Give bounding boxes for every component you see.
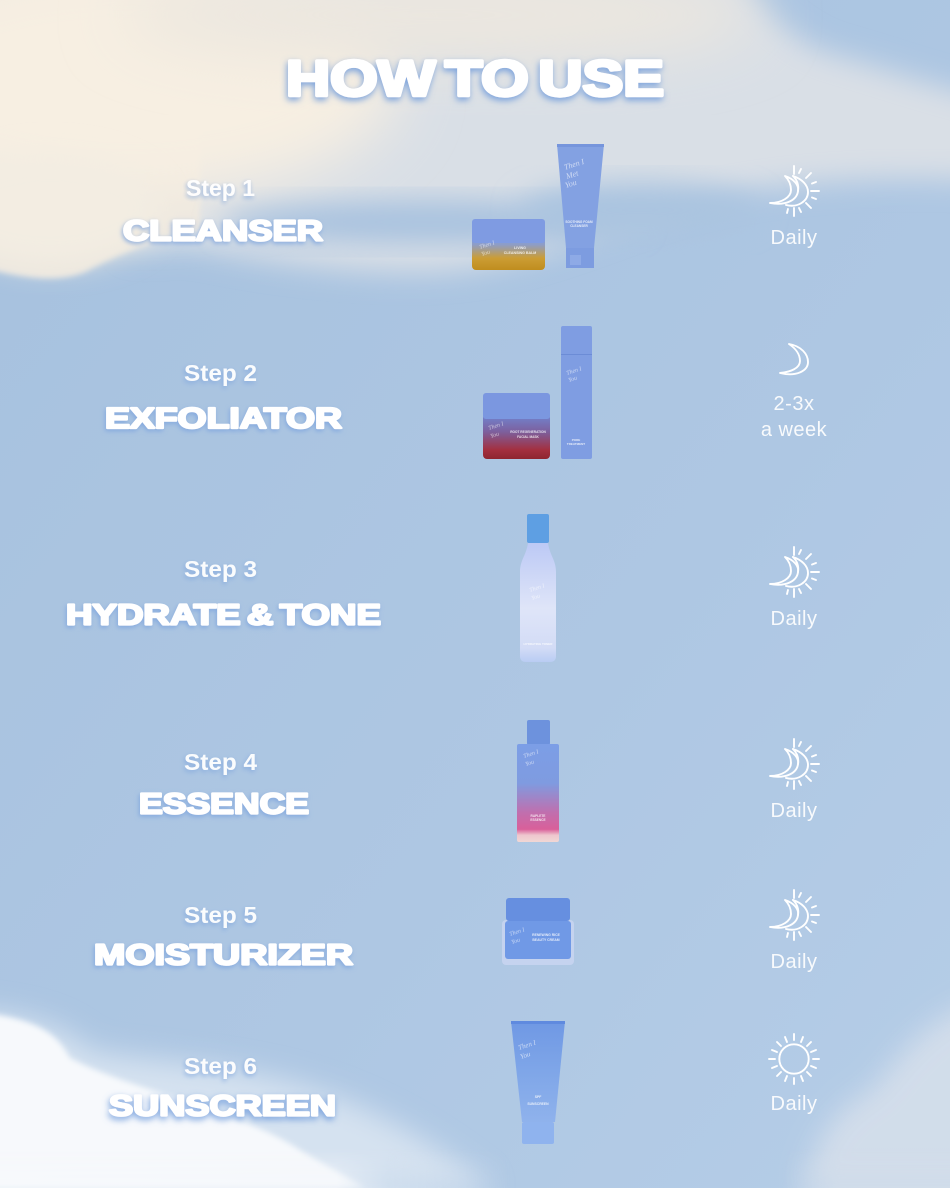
top cloud bbox=[0, 0, 950, 278]
step 6 product: Then I bbox=[517, 1038, 537, 1052]
step 6 product bbox=[511, 1021, 565, 1144]
step 4 text: ESSENCE bbox=[139, 788, 309, 820]
step 2 products: You bbox=[490, 431, 500, 440]
step 6 product: SUNSCREEN bbox=[527, 1102, 549, 1106]
step 1 products: Met bbox=[564, 168, 580, 181]
step 2 products: FACIAL MASK bbox=[517, 435, 540, 439]
step 1 products: Then I bbox=[563, 157, 586, 172]
step 1 products: You bbox=[564, 178, 578, 190]
step 6 frequency: Daily bbox=[771, 1093, 817, 1115]
step 1 products: LIVING bbox=[514, 246, 526, 250]
step 4 product: You bbox=[525, 759, 535, 768]
step 5 text: Step 5 bbox=[184, 902, 257, 928]
step 2 products: PORE bbox=[572, 438, 580, 442]
title: HOW TO USE bbox=[286, 50, 664, 106]
step 2 products: Then I bbox=[566, 366, 583, 377]
step 3 frequency bbox=[770, 547, 819, 630]
step 6 text bbox=[109, 1053, 336, 1122]
step 1 products: SOOTHING FOAM bbox=[565, 220, 593, 224]
step 2 text: Step 2 bbox=[184, 360, 257, 386]
step 1 products: CLEANSER bbox=[570, 224, 588, 228]
step 1 text: CLEANSER bbox=[123, 216, 323, 248]
step 3 product: HYDRATING TONER bbox=[524, 642, 553, 646]
step 5 product: You bbox=[511, 937, 521, 946]
step 2 frequency: 2-3x bbox=[774, 393, 814, 415]
step 4 frequency: Daily bbox=[771, 800, 817, 822]
step 6 product: You bbox=[519, 1050, 532, 1061]
step 4 product: ESSENCE bbox=[530, 818, 546, 822]
step 1 products: CLEANSING BALM bbox=[504, 251, 536, 255]
step 4 text: Step 4 bbox=[184, 749, 257, 775]
step 3 product: You bbox=[531, 593, 541, 602]
step 5 product: RENEWING RICE bbox=[532, 933, 561, 937]
step 1 text: Step 1 bbox=[186, 175, 255, 201]
bottom right cloud bbox=[780, 985, 950, 1188]
step 3 text bbox=[66, 556, 381, 632]
step 1 products: You bbox=[481, 249, 491, 258]
step 1 text bbox=[123, 175, 323, 248]
step 2 frequency: a week bbox=[761, 419, 828, 441]
step 6 frequency bbox=[769, 1034, 819, 1115]
step 4 frequency bbox=[770, 739, 819, 822]
step 2 products bbox=[483, 326, 592, 459]
step 5 product: Then I bbox=[509, 927, 526, 938]
step 6 product: SPF bbox=[535, 1095, 541, 1099]
step 3 frequency: Daily bbox=[771, 608, 817, 630]
step 2 products: Then I bbox=[488, 421, 505, 432]
step 1 products bbox=[472, 144, 604, 270]
step 4 product: RAPLETE bbox=[531, 814, 545, 818]
step 5 frequency: Daily bbox=[771, 951, 817, 973]
step 5 product: BEAUTY CREAM bbox=[532, 938, 560, 942]
bottom left cloud bbox=[0, 1008, 510, 1188]
step 1 frequency bbox=[770, 166, 819, 249]
step 1 products: Then I bbox=[479, 240, 496, 251]
step 5 product bbox=[502, 898, 574, 965]
step 4 product bbox=[517, 720, 559, 842]
step 1 frequency: Daily bbox=[771, 227, 817, 249]
step 5 frequency bbox=[770, 890, 819, 973]
step 6 text: SUNSCREEN bbox=[109, 1090, 336, 1122]
step 4 text bbox=[139, 749, 309, 820]
step 2 frequency bbox=[761, 344, 828, 441]
step 3 product: Then I bbox=[529, 583, 546, 594]
step 2 text bbox=[105, 360, 342, 435]
step 5 text: MOISTURIZER bbox=[94, 940, 353, 972]
step 6 text: Step 6 bbox=[184, 1053, 257, 1079]
step 5 text bbox=[94, 902, 353, 972]
step 3 text: Step 3 bbox=[184, 556, 257, 582]
step 2 products: ROOT REGENERATION bbox=[510, 430, 546, 434]
step 4 product: Then I bbox=[523, 749, 540, 760]
step 3 text: HYDRATE & TONE bbox=[66, 600, 381, 632]
step 3 product bbox=[520, 514, 556, 662]
step 2 products: You bbox=[568, 375, 578, 384]
step 2 text: EXFOLIATOR bbox=[105, 403, 342, 435]
step 2 products: TREATMENT bbox=[567, 442, 585, 446]
